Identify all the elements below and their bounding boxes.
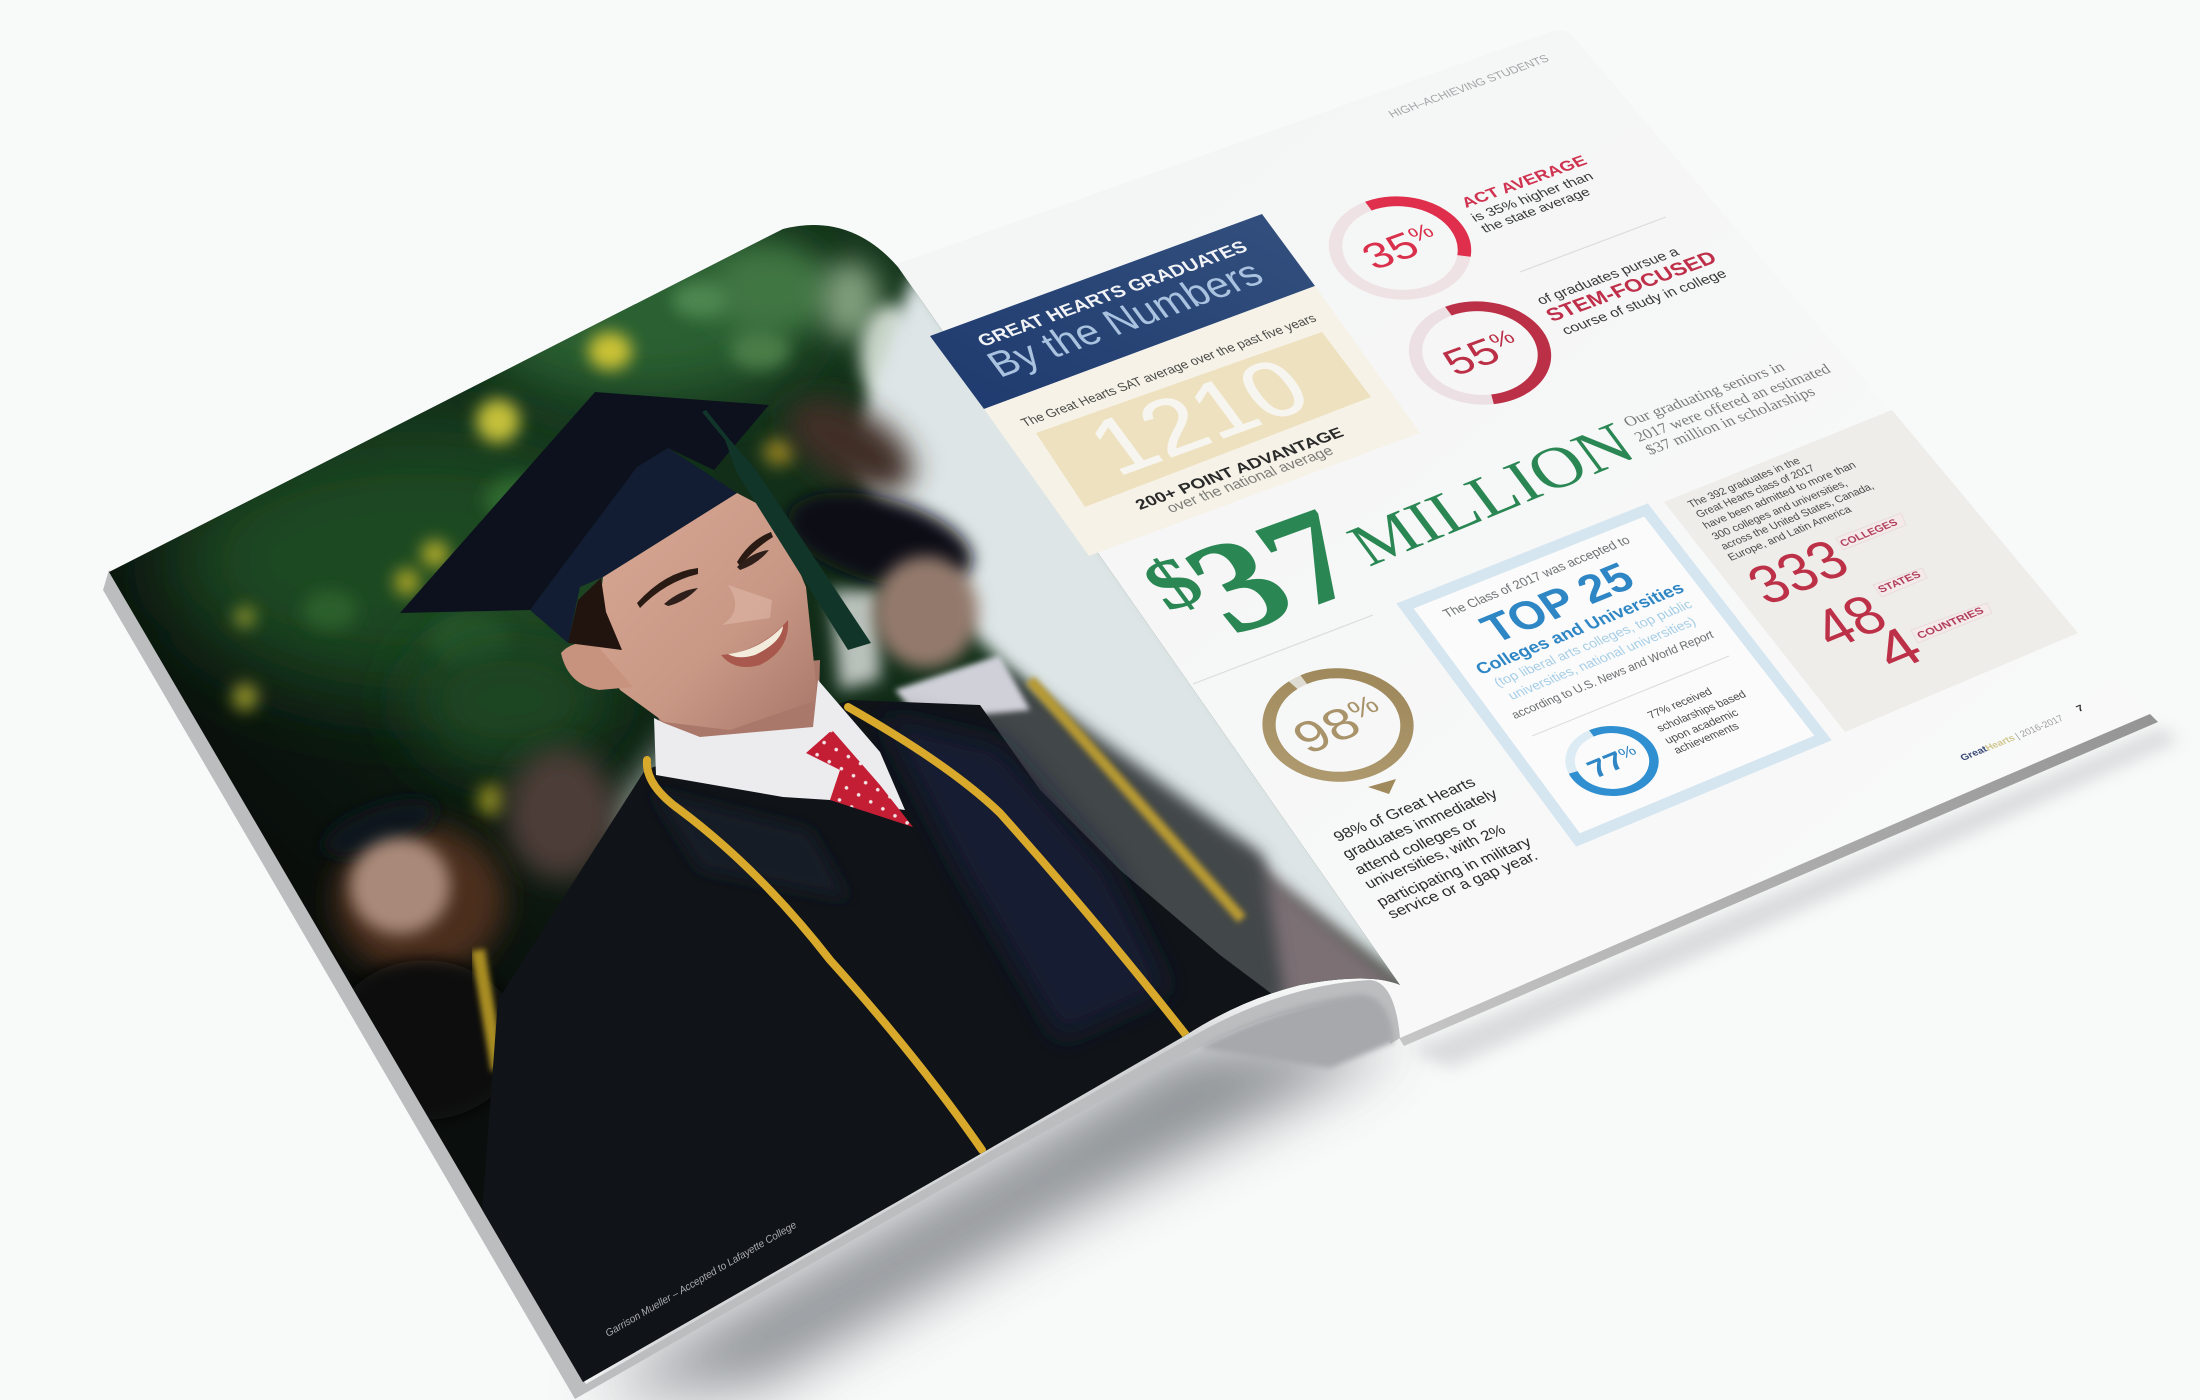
77% label: 77 <box>1581 746 1631 783</box>
panel: SAT average <box>984 286 1420 556</box>
colleges and universities: Colleges and Universities <box>1472 579 1688 678</box>
states count: 48 <box>1800 583 1899 660</box>
title banner <box>930 214 1315 409</box>
top 25 heading: TOP 25 <box>1472 554 1643 652</box>
colleges intro text: have been admitted to more than <box>1700 459 1858 531</box>
brows <box>637 568 698 608</box>
ACT text <box>1458 152 1596 236</box>
77% label: % <box>1615 742 1640 762</box>
gold cords <box>647 707 1186 1150</box>
colleges intro text <box>1685 455 1876 563</box>
55% label: 55 <box>1434 330 1509 384</box>
STEM text: of graduates pursue a <box>1534 245 1682 308</box>
SAT gold box <box>1036 332 1371 507</box>
98% description: participating in military <box>1373 833 1535 910</box>
panel: top 25 <box>1405 510 1823 840</box>
accepted to text: The Class of 2017 was accepted to <box>1440 533 1633 621</box>
gown <box>480 700 1280 1390</box>
book shadow <box>590 728 2180 1395</box>
STEM text: STEM-FOCUSED <box>1541 247 1721 325</box>
colleges count: 333 <box>1735 528 1861 616</box>
colleges tag: COLLEGES <box>1837 516 1900 549</box>
wall <box>852 272 1400 985</box>
98% description <box>1330 774 1541 922</box>
colleges intro text: 300 colleges and universities, <box>1709 478 1850 542</box>
point advantage: 200+ POINT ADVANTAGE <box>1132 424 1347 513</box>
source: according to U.S. News and World Report <box>1508 627 1717 721</box>
ACT text: is 35% higher than <box>1468 169 1596 225</box>
98% description: graduates immediately <box>1339 785 1501 862</box>
running head: HIGH–ACHIEVING STUDENTS <box>1386 52 1552 120</box>
footer <box>1958 703 2086 763</box>
colleges intro text: Europe, and Latin America <box>1725 504 1854 563</box>
countries tag: COUNTRIES <box>1914 605 1986 641</box>
$37 million headline: $ <box>1127 542 1220 626</box>
right page <box>880 30 2158 1046</box>
98% description: service or a gap year. <box>1384 847 1541 922</box>
scholarship text: upon academic <box>1662 706 1741 746</box>
55% label: % <box>1484 326 1520 353</box>
eyes <box>664 588 698 606</box>
tassel <box>702 410 871 650</box>
ring: 35% ACT <box>1312 185 1488 311</box>
ACT text: ACT AVERAGE <box>1458 152 1590 211</box>
ear <box>561 642 633 690</box>
SAT score: 1210 <box>1070 341 1328 492</box>
ACT text: the state average <box>1478 185 1593 236</box>
ring: 77% scholarships <box>1555 718 1669 804</box>
98% description: universities, with 2% <box>1361 821 1509 892</box>
scholarship text: scholarships based <box>1654 688 1749 734</box>
SAT caption: The Great Hearts SAT average over the past five years <box>1018 312 1319 430</box>
scholarship text <box>1645 685 1749 756</box>
scholarship note: $37 million in scholarships <box>1642 383 1818 458</box>
parenthetical: universities, national universities) <box>1505 615 1699 703</box>
panel: colleges <box>1664 410 2078 732</box>
footer: | 2016-2017 <box>2013 714 2066 741</box>
left page edge and curl <box>103 570 1400 1399</box>
hair <box>568 578 622 650</box>
photo caption: Garrison Mueller – Accepted to Lafayette College <box>603 1218 799 1339</box>
blurred student left <box>316 749 616 1120</box>
ring: 55% STEM <box>1392 290 1568 416</box>
icon: pointer triangle <box>1368 779 1396 794</box>
35% label: % <box>1403 220 1439 247</box>
scholarship note: 2017 were offered an estimated <box>1631 361 1834 445</box>
footer: 7 <box>2074 703 2086 714</box>
banner title: GREAT HEARTS GRADUATES <box>974 238 1252 350</box>
colleges intro text: across the United States, Canada, <box>1718 480 1876 552</box>
98% label: % <box>1341 690 1385 725</box>
countries count: 4 <box>1861 615 1935 682</box>
98% label: 98 <box>1282 697 1371 763</box>
nose <box>722 585 772 625</box>
mortarboard cap <box>400 392 769 643</box>
STEM text: course of study in college <box>1559 267 1730 338</box>
$37 million headline: 37 <box>1155 480 1394 661</box>
35% label: 35 <box>1353 224 1428 278</box>
tie <box>806 730 913 827</box>
scholarship text: 77% received <box>1645 685 1715 721</box>
banner subtitle: By the Numbers <box>978 252 1271 385</box>
national average note: over the national average <box>1163 443 1337 516</box>
scholarship note: Our graduating seniors in <box>1620 358 1788 430</box>
colleges intro text: The 392 graduates in the <box>1685 455 1803 510</box>
ring: 98% college <box>1244 655 1432 795</box>
page sheet <box>880 30 2148 1038</box>
98% description: attend colleges or <box>1351 814 1481 878</box>
scholarship text: achievements <box>1671 720 1742 756</box>
photo background foliage <box>100 220 1440 1400</box>
smile <box>721 620 788 667</box>
parenthetical: (top liberal arts colleges, top public <box>1491 598 1695 690</box>
page edge <box>1398 714 2158 1046</box>
neck and face <box>561 493 820 745</box>
footer: Great <box>1958 744 1990 763</box>
98% description: 98% of Great Hearts <box>1330 774 1479 845</box>
colleges intro text: Great Hearts class of 2017 <box>1693 462 1817 520</box>
collar <box>654 680 905 810</box>
states tag: STATES <box>1875 569 1923 595</box>
photo: graduate <box>100 220 1440 1400</box>
$37 million headline: MILLION <box>1335 411 1648 579</box>
blurred student right <box>777 475 1285 1000</box>
footer: Hearts <box>1983 733 2017 753</box>
$37 million headline <box>1127 411 1648 661</box>
